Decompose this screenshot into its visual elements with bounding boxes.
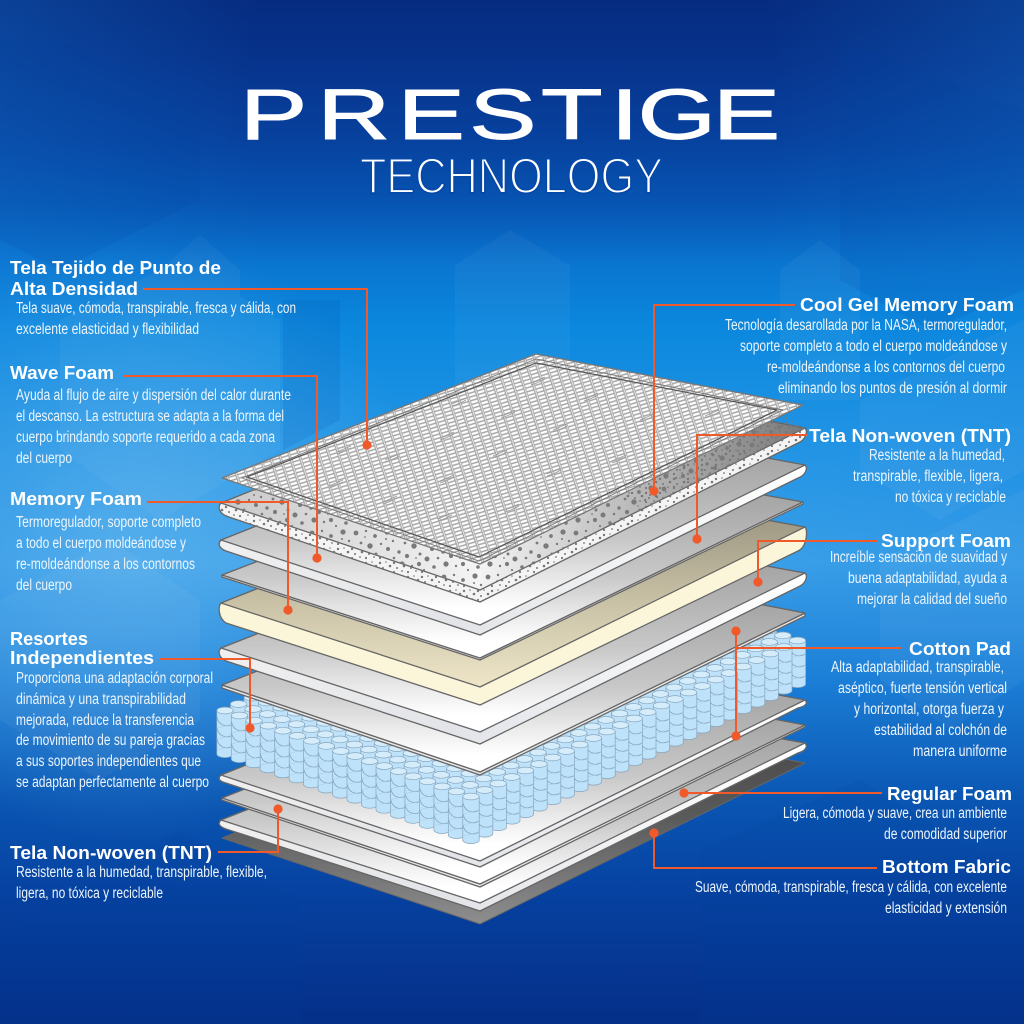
callout: Bottom Fabric	[649, 828, 1011, 917]
callout: Tela Tejido de Punto de Alta Densidad: Alta Densidad	[10, 278, 138, 299]
layer: memory foam cream	[219, 478, 807, 705]
callout: Wave Foam	[10, 362, 322, 563]
layer: cool gel memory foam speckled	[219, 376, 806, 602]
callout: Resortes Independientes: Independientes	[10, 647, 154, 668]
callout: Tela Non-woven (TNT) left: Resistente a la humedad, transpirable, flexible,	[16, 864, 267, 881]
callout: Tela Non-woven (TNT) right	[692, 425, 1011, 544]
callout: Wave Foam: cuerpo brindando soporte requerido a cada zona	[16, 429, 275, 446]
callout: Memory Foam: Memory Foam	[10, 488, 142, 509]
callout: Wave Foam: del cuerpo	[16, 450, 72, 467]
callout: Resortes Independientes: Resortes	[10, 628, 88, 649]
callout: Tela Tejido de Punto de Alta Densidad: Tela Tejido de Punto de	[10, 257, 221, 278]
callout: Resortes Independientes: mejorada, reduce la transferencia	[16, 712, 194, 729]
callout: Memory Foam: del cuerpo	[16, 577, 72, 594]
callout: Wave Foam: Wave Foam	[10, 362, 114, 383]
layer: high density knit fabric quilt	[222, 354, 803, 564]
mattress layers exploded diagram	[217, 354, 807, 924]
layer: bottom fabric	[222, 712, 805, 924]
callout: Tela Non-woven (TNT) right: Tela Non-woven (TNT)	[809, 425, 1011, 446]
callout: Regular Foam	[679, 783, 1012, 843]
layer: support foam plate	[219, 524, 806, 744]
layer: wave foam plate	[219, 415, 806, 635]
layer: regular foam	[219, 695, 806, 911]
callout: Resortes Independientes: se adaptan perfectamente al cuerpo	[16, 774, 209, 791]
heading: PRESTIGE: PRESTIGE	[240, 75, 780, 154]
callout: Memory Foam: re-moldeándonse a los contornos	[16, 556, 195, 573]
callout: Support Foam	[753, 530, 1011, 608]
callout: Memory Foam: Termoregulador, soporte completo	[16, 514, 201, 531]
layer: thin white sheet	[222, 454, 803, 660]
callout: Tela Tejido de Punto de Alta Densidad: excelente elasticidad y flexibilidad	[16, 321, 199, 338]
callout: Bottom Fabric: Bottom Fabric	[882, 856, 1011, 877]
callout: Tela Non-woven (TNT) left	[10, 804, 283, 902]
callout: Cool Gel Memory Foam	[649, 294, 1014, 496]
callout: Resortes Independientes: a sus soportes independientes que	[16, 753, 201, 770]
layer: independent pocket springs	[217, 551, 806, 844]
callout: Wave Foam: el descanso. La estructura se adapta a la forma del	[16, 408, 284, 425]
callout: Regular Foam: Regular Foam	[887, 783, 1012, 804]
title	[240, 75, 780, 204]
callout: Resortes Independientes: dinámica y una transpirabilidad	[16, 691, 186, 708]
callout: Resortes Independientes	[10, 628, 255, 791]
callout: Tela Non-woven (TNT) left: ligera, no tóxica y reciclable	[16, 885, 163, 902]
heading: TECHNOLOGY: TECHNOLOGY	[360, 148, 663, 204]
callout: Resortes Independientes: Proporciona una adaptación corporal	[16, 670, 213, 687]
callout: Cotton Pad: Cotton Pad	[909, 638, 1011, 659]
layer: thin sheet	[222, 674, 805, 887]
layer: cotton pad lower	[219, 649, 806, 867]
callout: Tela Tejido de Punto de Alta Densidad	[10, 257, 372, 450]
callout: Resortes Independientes: de movimiento de su pareja gracias	[16, 732, 205, 749]
callout: Support Foam: Support Foam	[881, 530, 1011, 551]
callout: Tela Tejido de Punto de Alta Densidad: Tela suave, cómoda, transpirable, fresca y cálida, con	[16, 300, 296, 317]
callout: Wave Foam: Ayuda al flujo de aire y dispersión del calor durante	[16, 387, 291, 404]
callout: Tela Non-woven (TNT) left: Tela Non-woven (TNT)	[10, 842, 212, 863]
callout: Cotton Pad	[731, 626, 1011, 760]
layer: cotton pad upper sheet	[222, 561, 805, 775]
callout: Cool Gel Memory Foam: Cool Gel Memory Foam	[800, 294, 1014, 315]
callout: Memory Foam: a todo el cuerpo moldeándose y	[16, 535, 186, 552]
callout: Memory Foam	[10, 488, 293, 615]
